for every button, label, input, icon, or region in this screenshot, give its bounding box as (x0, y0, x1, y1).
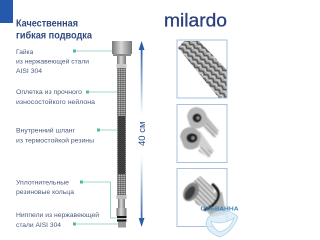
label: nipple (16, 211, 99, 229)
length arrow: 40 cm: 40 см (137, 122, 148, 146)
label: braid: Оплетка из прочного (16, 89, 82, 96)
blue corner block (0, 0, 13, 23)
leader: inner hose (97, 128, 118, 132)
label: nut: AISI 304 (16, 68, 42, 75)
length arrow: 40 cm (137, 41, 148, 227)
label: inner hose (16, 126, 94, 144)
title (16, 18, 92, 42)
label: nut: Гайка (16, 48, 34, 56)
title: Качественная (16, 18, 78, 30)
panel: braid close-up (177, 40, 227, 98)
infographic (0, 0, 238, 238)
label: braid (16, 89, 95, 106)
logo: milardo (164, 10, 227, 30)
panel: nuts close-up (177, 104, 227, 162)
panel: nipple close-up (177, 168, 227, 226)
label: seal rings: Уплотнительные (16, 180, 69, 186)
leader: seal rings (80, 180, 118, 218)
label: braid: износостойкого нейлона (16, 98, 95, 106)
label: nut (16, 48, 89, 75)
label: nipple: стали AISI 304 (16, 222, 61, 229)
label: seal rings (16, 180, 74, 196)
leader: nut (73, 50, 112, 52)
label: seal rings: резиновые кольца (16, 189, 74, 196)
watermark (200, 206, 238, 237)
label: inner hose: из термостойкой резины (16, 136, 94, 144)
label: nut: из нержавеющей стали (16, 58, 89, 66)
label: nipple: Ниппели из нержавеющей (16, 211, 99, 219)
label: inner hose: Внутренний шланг (16, 126, 76, 134)
hose product (112, 41, 132, 228)
watermark: СИБВАННА (200, 206, 238, 212)
title: гибкая подводка (16, 30, 92, 42)
leader: nipple (73, 222, 118, 226)
leader: braid (86, 90, 117, 94)
